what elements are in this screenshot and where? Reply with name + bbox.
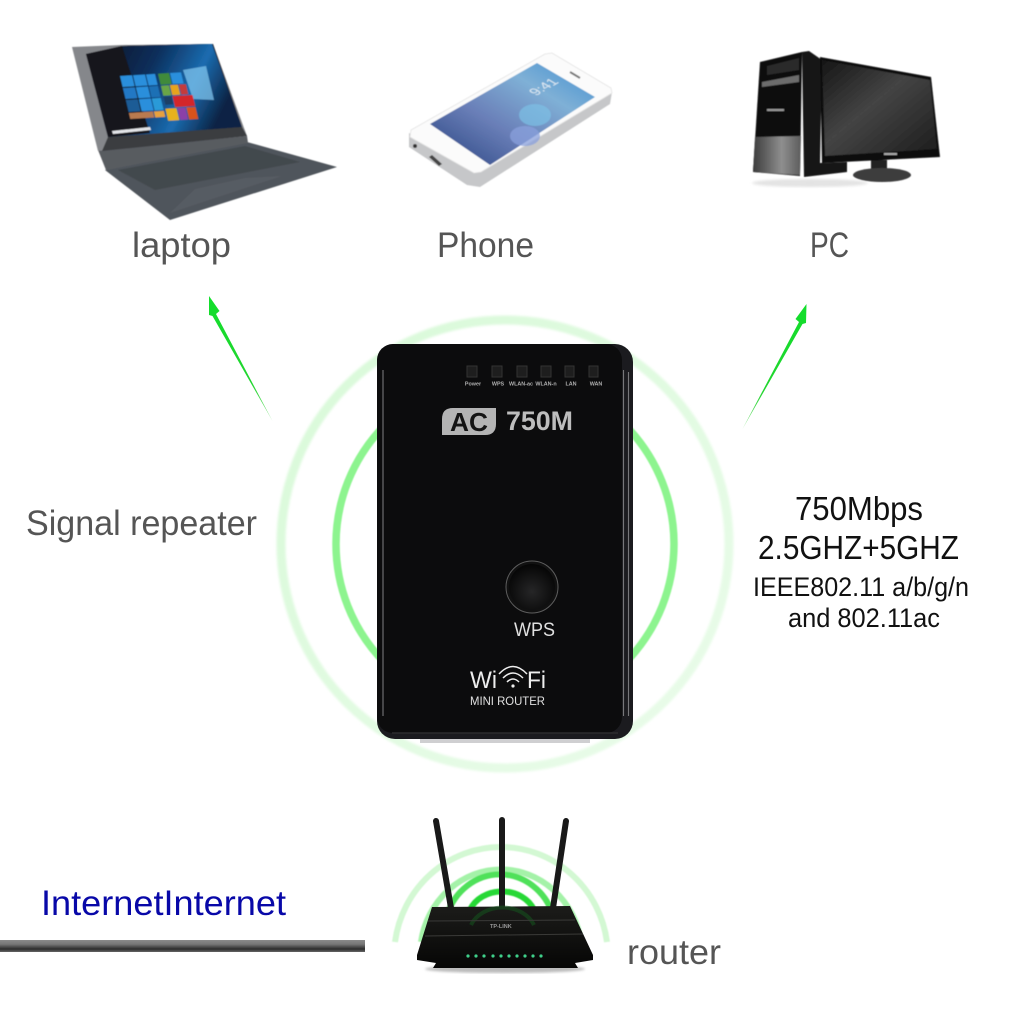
laptop screen bezel <box>86 44 242 137</box>
laptop start menu panel <box>86 46 150 137</box>
PC tower side <box>802 51 847 177</box>
LED labels: LAN <box>565 382 577 388</box>
Wi-Fi logo <box>470 666 546 694</box>
standard second line: and 802.11ac <box>788 603 940 633</box>
laptop keyboard deck <box>105 142 337 220</box>
PC tower front <box>753 52 802 176</box>
outer ring <box>281 320 729 768</box>
speed: 750Mbps <box>795 490 923 527</box>
PC floor reflection <box>752 179 868 187</box>
laptop hinge <box>98 136 248 170</box>
signal rings <box>281 320 729 768</box>
monitor stand neck <box>871 160 887 174</box>
label: Internet: InternetInternet <box>41 884 286 923</box>
PC drive bay <box>767 58 799 75</box>
Wi-Fi logo: Fi <box>527 667 546 694</box>
phone speaker and port <box>429 155 442 166</box>
icon: smartphone <box>409 53 612 187</box>
PC brushed panel <box>753 136 801 175</box>
PC brand label <box>767 109 784 111</box>
MINI ROUTER label: MINI ROUTER <box>470 694 545 708</box>
router LEDs <box>466 954 543 958</box>
label: Phone: Phone <box>437 226 534 265</box>
device edge highlights <box>383 370 628 716</box>
router signal arcs <box>395 847 607 942</box>
Wi-Fi logo: Wi <box>470 667 497 694</box>
inner ring <box>336 375 674 713</box>
laptop key area <box>118 146 300 190</box>
monitor stand base <box>853 168 911 182</box>
phone jack <box>413 144 417 148</box>
device bottom lip <box>392 732 618 734</box>
device: mini router <box>377 344 633 743</box>
device body rim <box>377 344 633 739</box>
router body <box>417 906 593 968</box>
icon: wireless router <box>395 820 607 973</box>
LED labels: WLAN-n <box>535 382 557 388</box>
phone silver side <box>409 92 612 187</box>
phone white face <box>410 53 612 173</box>
LED labels <box>465 382 602 388</box>
laptop search bar <box>112 127 151 134</box>
LED labels: WLAN-ac <box>509 382 533 388</box>
label: PC: PC <box>810 226 849 265</box>
router brand: TP-LINK <box>490 924 512 930</box>
WPS label: WPS <box>514 620 555 641</box>
750M text: 750M <box>506 406 573 436</box>
laptop windows logo <box>183 66 214 100</box>
device face <box>377 344 622 733</box>
label: router: router <box>627 933 721 972</box>
WPS button <box>506 561 558 613</box>
router shadow <box>425 965 585 973</box>
standard: IEEE802.11 a/b/g/n <box>753 572 969 602</box>
laptop lid <box>72 44 247 151</box>
router panel seams <box>425 920 583 936</box>
router faint arcs over body <box>471 908 534 925</box>
internet cable <box>0 940 365 952</box>
LED labels: Power <box>465 382 482 388</box>
monitor screen <box>822 60 937 156</box>
laptop trackpad <box>170 176 282 213</box>
phone wallpaper bokeh <box>519 104 551 126</box>
monitor brand text <box>884 153 897 155</box>
phone earpiece <box>570 72 580 78</box>
LED labels: WPS <box>492 382 505 388</box>
LED labels: WAN <box>590 382 602 388</box>
monitor frame <box>820 57 940 163</box>
arrow: to laptop <box>209 296 272 421</box>
arrow: to PC <box>742 304 806 429</box>
PC front ports strip <box>762 75 799 87</box>
status LEDs <box>467 366 598 377</box>
label: laptop: laptop <box>132 226 231 265</box>
laptop lower bezel <box>102 127 247 151</box>
phone wallpaper bokeh lower <box>510 126 540 146</box>
icon: laptop <box>72 44 337 220</box>
label: Signal repeater: Signal repeater <box>26 504 257 543</box>
laptop display wallpaper <box>86 44 242 137</box>
phone display <box>430 63 595 165</box>
AC badge <box>442 407 496 437</box>
icon: desktop PC <box>752 51 940 187</box>
spec text block <box>753 490 969 633</box>
router antennas <box>436 820 566 908</box>
AC badge: AC <box>450 407 488 437</box>
frequency: 2.5GHZ+5GHZ <box>758 529 959 566</box>
laptop start tiles <box>120 72 198 123</box>
phone lock clock: 9:41 <box>525 76 562 98</box>
device bottom edge <box>420 736 590 743</box>
